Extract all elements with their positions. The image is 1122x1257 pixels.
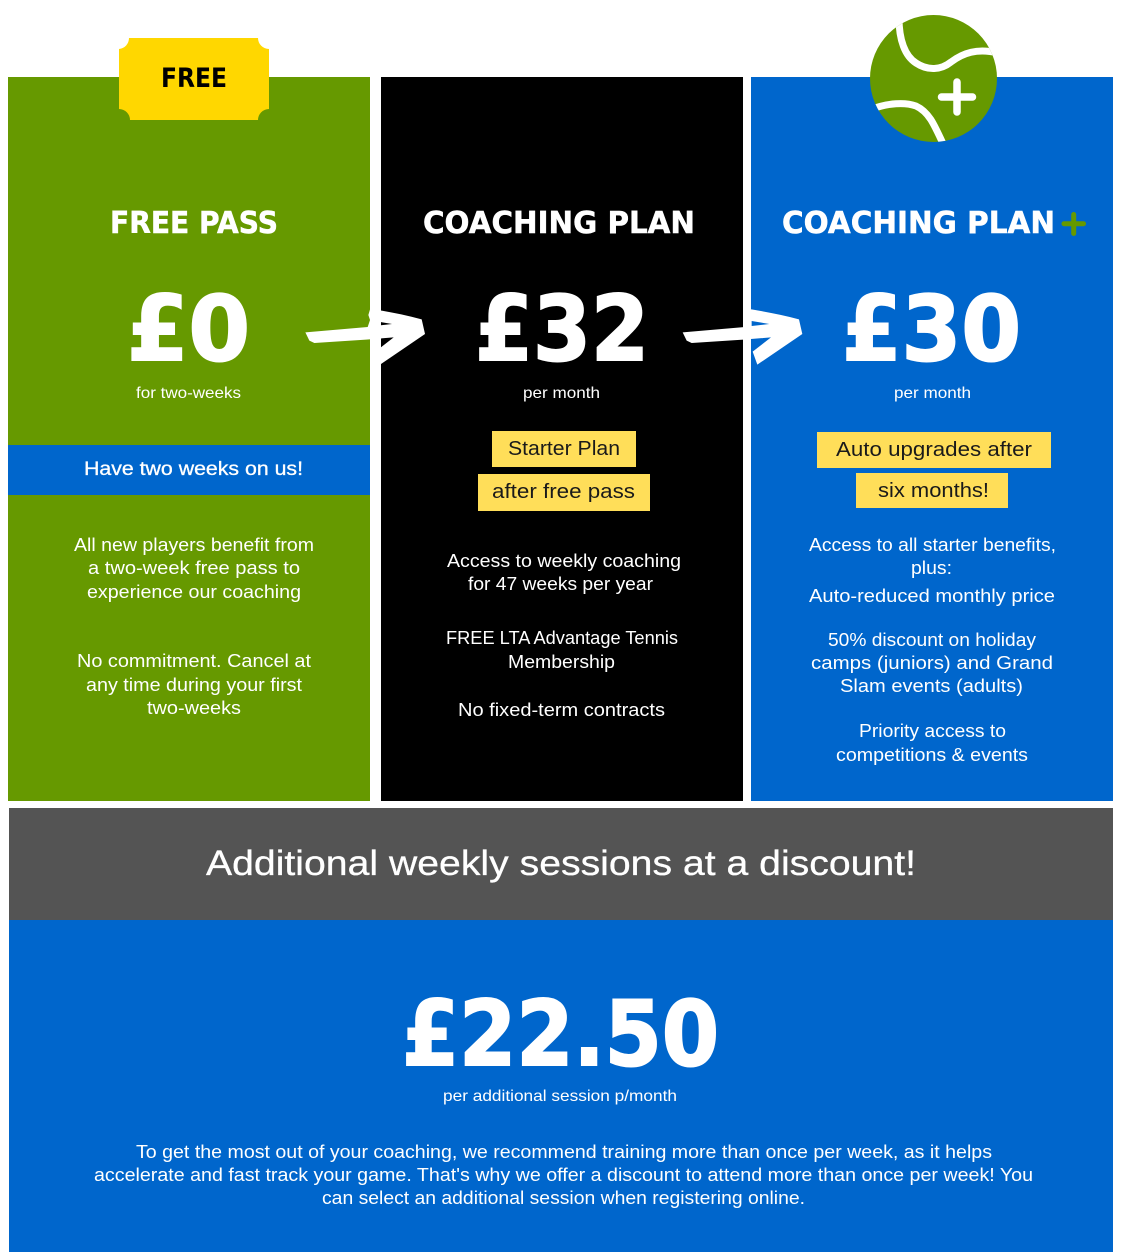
panel: additional session price [9, 920, 1113, 1252]
text: holiday discount [811, 630, 1053, 696]
text: free pass benefit [74, 535, 314, 602]
text: priority access: Priority access to [859, 721, 1006, 741]
text: starter benefits [809, 535, 1056, 606]
highlight: starter plan [492, 431, 636, 467]
banner: have two weeks on us [8, 445, 370, 495]
price note: per month [523, 385, 600, 402]
text: recommendation paragraph: accelerate and fast track your game. That's why we offer a discount to attend more than once per week! You [94, 1165, 1033, 1185]
arrow: free pass to coaching plan [305, 309, 425, 365]
text: starter benefits: Auto-reduced monthly price [809, 586, 1055, 606]
price note: for two-weeks [136, 385, 241, 402]
text: weekly coaching: Access to weekly coaching [447, 551, 681, 571]
text: starter benefits: Access to all starter benefits, [809, 535, 1056, 555]
banner: have two weeks on us: Have two weeks on us! [84, 459, 303, 480]
text: holiday discount: 50% discount on holiday [828, 630, 1036, 650]
text: LTA membership [446, 628, 678, 672]
text: no commitment: any time during your first [86, 675, 302, 695]
text: recommendation paragraph: To get the most out of your coaching, we recommend training more than once per week, as it helps [136, 1142, 992, 1162]
panel: coaching plan [381, 77, 743, 801]
text: holiday discount: Slam events (adults) [840, 676, 1023, 696]
highlight: starter plan: Starter Plan [508, 438, 620, 460]
highlight: after free pass: after free pass [492, 481, 635, 503]
text: weekly coaching: for 47 weeks per year [468, 574, 653, 594]
text: priority access [836, 721, 1028, 765]
badge: free ticket: FREE [161, 63, 227, 94]
icon: green plus [1064, 214, 1084, 234]
price: £32: £32 [475, 277, 649, 382]
highlight: six months: six months! [878, 480, 989, 502]
highlight: six months [856, 473, 1008, 508]
heading: free pass: FREE PASS [110, 206, 278, 241]
highlight: auto upgrades [817, 432, 1051, 468]
text: free pass benefit: All new players benefit from [74, 535, 314, 555]
panel: coaching plan plus [751, 77, 1113, 801]
text: priority access: competitions & events [836, 745, 1028, 765]
text: no commitment [77, 651, 311, 718]
heading: coaching plan plus: COACHING PLAN [782, 206, 1055, 241]
price: £22.50: £22.50 [402, 982, 719, 1087]
price: £30: £30 [842, 277, 1021, 382]
price: £0: £0 [127, 277, 250, 382]
badge: free ticket [119, 38, 269, 120]
panel: free pass [8, 77, 370, 801]
price note: per additional session p/month [443, 1088, 677, 1105]
text: no commitment: No commitment. Cancel at [77, 651, 311, 671]
text: holiday discount: camps (juniors) and Grand [811, 653, 1053, 673]
icon: tennis ball [870, 15, 998, 148]
highlight: after free pass [478, 474, 650, 511]
text: recommendation paragraph [94, 1142, 1033, 1208]
text: LTA membership: FREE LTA Advantage Tennis [446, 628, 678, 648]
text: starter benefits: plus: [911, 558, 952, 578]
text: free pass benefit: experience our coaching [87, 582, 301, 602]
text: no contracts: No fixed-term contracts [458, 700, 665, 720]
header band: additional sessions: Additional weekly sessions at a discount! [206, 844, 916, 883]
price note: per month [894, 385, 971, 402]
text: free pass benefit: a two-week free pass to [88, 558, 300, 578]
heading: coaching plan: COACHING PLAN [423, 206, 695, 241]
arrow: coaching plan to plan plus [683, 309, 802, 365]
highlight: auto upgrades: Auto upgrades after [836, 439, 1032, 461]
text: recommendation paragraph: can select an additional session when registering online. [322, 1188, 805, 1208]
header band: additional sessions [9, 808, 1113, 920]
text: no commitment: two-weeks [147, 698, 241, 718]
text: weekly coaching [447, 551, 681, 594]
text: LTA membership: Membership [508, 652, 615, 672]
